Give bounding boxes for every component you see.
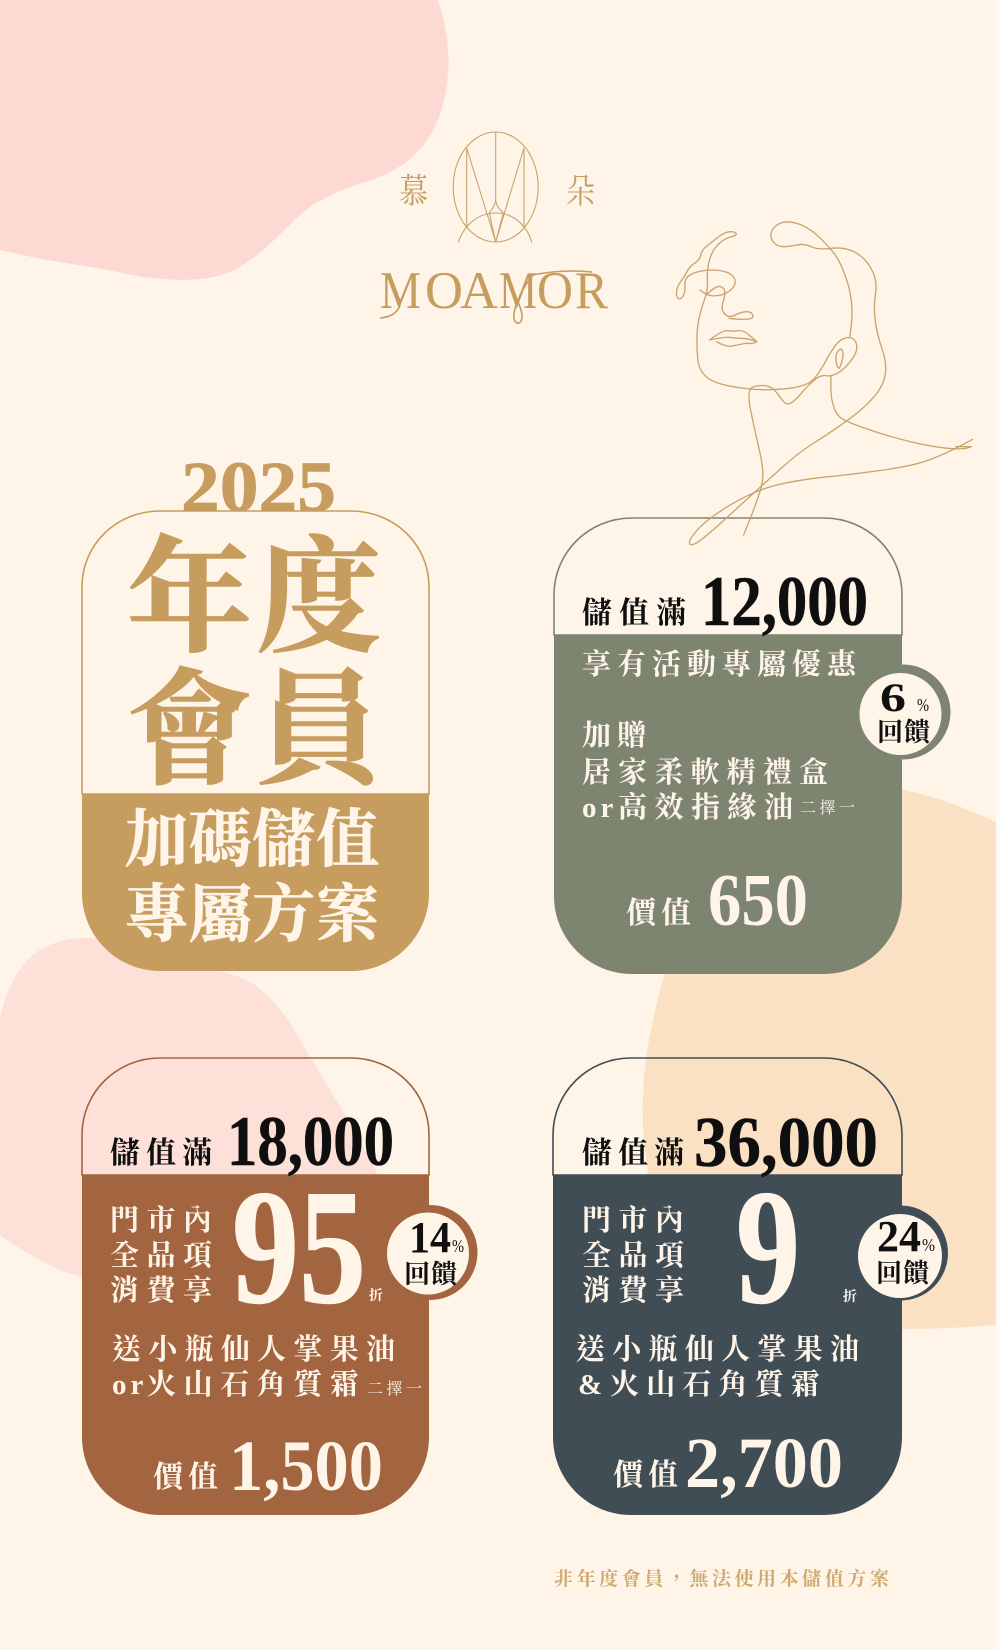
logo wordmark: O bbox=[425, 262, 463, 320]
value: 價值 bbox=[613, 1459, 678, 1492]
value: 價值 bbox=[626, 897, 691, 930]
badge: 24% bbox=[853, 1206, 948, 1300]
heading: 年度: 年度 bbox=[127, 531, 381, 669]
gift text: 火山石角質霜 bbox=[147, 1368, 359, 1401]
card shape bbox=[553, 1058, 902, 1515]
value: 2,700 bbox=[685, 1423, 843, 1503]
store discount text bbox=[582, 1204, 685, 1307]
store discount text bbox=[110, 1204, 213, 1307]
store discount text: 消費享 bbox=[110, 1274, 212, 1307]
gift text: 二擇一 bbox=[367, 1380, 422, 1398]
deposit amount: 18,000 bbox=[227, 1103, 394, 1181]
gift text: & bbox=[578, 1369, 602, 1401]
subheading: 專屬方案: 專屬方案 bbox=[125, 880, 379, 950]
gift text: 送小瓶仙人掌果油 bbox=[112, 1333, 395, 1366]
background blob: pink top left bbox=[0, 0, 449, 280]
value: 價值 bbox=[153, 1461, 218, 1494]
discount 9: 9 bbox=[736, 1157, 800, 1338]
icon: oval monogram bbox=[453, 132, 538, 242]
badge: 14% bbox=[382, 1205, 478, 1300]
gift text: or bbox=[582, 792, 617, 824]
value bbox=[153, 1426, 383, 1506]
store discount text: 全品項 bbox=[582, 1239, 685, 1272]
value bbox=[613, 1423, 843, 1503]
badge: 14%: 回饋 bbox=[404, 1260, 460, 1289]
logo characters: 朵 bbox=[566, 174, 595, 211]
discount 9: 折 bbox=[843, 1288, 857, 1305]
gift text bbox=[582, 719, 855, 824]
logo wordmark: R bbox=[575, 262, 609, 320]
deposit amount: 12,000 bbox=[701, 563, 868, 641]
gift text: 二擇一 bbox=[800, 799, 855, 817]
discount 9 bbox=[736, 1157, 857, 1338]
panel: 12,000 plan bbox=[554, 518, 950, 974]
card shape bbox=[82, 1058, 429, 1515]
deposit label: 儲值滿 bbox=[582, 597, 686, 630]
logo wordmark: M bbox=[380, 262, 421, 320]
deposit amount: 36,000 bbox=[694, 1104, 878, 1182]
panel: 18,000 plan bbox=[82, 1058, 478, 1515]
badge: 14%: % bbox=[452, 1236, 464, 1256]
gift text: 居家柔軟精禮盒 bbox=[582, 756, 828, 789]
badge: 24%: 回饋 bbox=[876, 1259, 932, 1288]
benefit text: 享有活動專屬優惠 bbox=[582, 648, 859, 681]
gift text: 加贈 bbox=[582, 719, 646, 752]
gift text bbox=[112, 1333, 422, 1401]
gift text: 火山石角質霜 bbox=[610, 1368, 820, 1401]
logo: MOAMOR brand mark bbox=[380, 132, 609, 323]
logo wordmark: O bbox=[537, 262, 573, 320]
value: 1,500 bbox=[229, 1426, 383, 1506]
badge: 14%: 14 bbox=[409, 1213, 451, 1262]
logo characters bbox=[399, 173, 595, 211]
year: 2025 bbox=[181, 447, 336, 527]
deposit label: 儲值滿 bbox=[582, 1137, 684, 1170]
badge: 24%: % bbox=[922, 1235, 935, 1255]
badge: 6% bbox=[856, 664, 950, 760]
background blob: peach right bbox=[643, 788, 996, 1329]
store discount text: 全品項 bbox=[110, 1239, 213, 1272]
gift text: 高效指緣油 bbox=[618, 791, 793, 824]
panel: 36,000 plan bbox=[553, 1058, 948, 1515]
store discount text: 門市內 bbox=[110, 1204, 212, 1237]
background blob: pink bottom left bbox=[0, 938, 380, 1290]
footnote: 非年度會員，無法使用本儲值方案 bbox=[554, 1567, 889, 1590]
heading: 會員: 會員 bbox=[127, 663, 381, 801]
store discount text: 門市內 bbox=[582, 1204, 684, 1237]
discount 95: 95 bbox=[232, 1157, 366, 1338]
badge: 6%: % bbox=[917, 695, 929, 715]
gift text: 送小瓶仙人掌果油 bbox=[576, 1333, 859, 1366]
card shape bbox=[554, 518, 902, 974]
title block: 2025 annual member bbox=[82, 447, 429, 971]
illustration: line art face bbox=[676, 222, 973, 545]
title card shape bbox=[82, 511, 429, 971]
logo wordmark bbox=[380, 262, 609, 323]
deposit label: 儲值滿 bbox=[110, 1137, 212, 1170]
value bbox=[626, 860, 808, 942]
logo wordmark: M bbox=[499, 262, 537, 320]
discount 95: 折 bbox=[369, 1287, 383, 1304]
logo wordmark: A bbox=[460, 262, 498, 320]
badge: 6%: 回饋 bbox=[877, 718, 933, 747]
subheading: 加碼儲值: 加碼儲值 bbox=[125, 805, 379, 875]
gift text bbox=[576, 1333, 859, 1401]
logo characters: 慕 bbox=[399, 173, 428, 211]
badge: 6%: 6 bbox=[880, 675, 906, 720]
gift text: or bbox=[112, 1369, 147, 1401]
right edge strip bbox=[996, 0, 1000, 1650]
badge: 24%: 24 bbox=[877, 1212, 921, 1261]
value: 650 bbox=[708, 860, 808, 942]
store discount text: 消費享 bbox=[582, 1274, 684, 1307]
